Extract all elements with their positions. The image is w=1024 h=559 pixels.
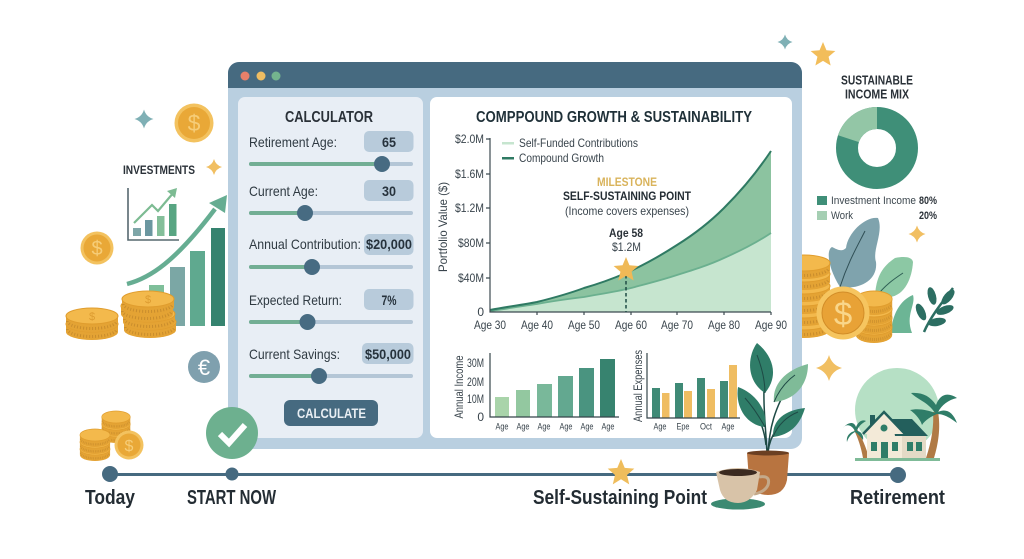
- x axis labels: Age 90: [755, 318, 787, 332]
- x axis labels: Age 60: [615, 318, 647, 332]
- annual income bar chart: Age: [602, 422, 614, 432]
- annual expenses bar chart: Epe: [676, 422, 690, 432]
- left palm: [843, 420, 869, 458]
- icon: teal sparkle: [778, 34, 792, 50]
- icon: coins above today: [80, 411, 144, 461]
- timeline line: [110, 473, 898, 476]
- annual income bar chart: Age: [516, 422, 530, 432]
- icon: green leaf: [875, 257, 914, 333]
- axes: [486, 138, 771, 315]
- y axis labels: $80M: [458, 236, 484, 250]
- current age control: Current Age:: [249, 183, 318, 199]
- panel: calculator: [238, 97, 423, 438]
- panel: growth charts: [430, 97, 792, 438]
- expected return control: 7%: [382, 293, 396, 308]
- milestone callout: $1.2M: [612, 240, 641, 254]
- y axis title: Portfolio Value ($): [436, 182, 450, 272]
- timeline: [85, 459, 945, 509]
- calculate button: CALCULATE: [297, 406, 366, 421]
- donut legend: 20%: [919, 210, 937, 222]
- coin stack small: [66, 308, 118, 340]
- y axis labels: $40M: [458, 271, 484, 285]
- annual income bar chart: Age: [538, 422, 550, 432]
- current savings control: $50,000: [365, 347, 411, 362]
- title bar: [228, 62, 802, 88]
- icon: teal sparkle: [134, 110, 154, 128]
- x axis labels: Age 70: [661, 318, 693, 332]
- milestone callout: MILESTONE: [597, 175, 657, 189]
- icon: dollar coin top: $: [188, 110, 201, 136]
- icon: coins above today: $: [125, 438, 134, 455]
- y axis labels: 0: [477, 305, 484, 319]
- coin stack small: $: [89, 311, 95, 323]
- node: self-sustaining point: [533, 459, 707, 509]
- icon: orange sparkle near house: [816, 355, 842, 381]
- annual income bar chart: 0: [477, 410, 484, 424]
- icon: orange sparkle: [206, 159, 222, 175]
- x axis labels: Age 50: [568, 318, 600, 332]
- right palm: [910, 393, 957, 458]
- x axis labels: Age 40: [521, 318, 553, 332]
- annual expenses bar chart: Age: [722, 422, 734, 432]
- milestone callout: (Income covers expenses): [565, 204, 689, 218]
- node: retirement: [850, 467, 945, 509]
- icon: dollar coin left: $: [91, 238, 103, 260]
- annual contribution control: Annual Contribution:: [249, 236, 361, 252]
- annual income bar chart: Age: [560, 422, 572, 432]
- income mix heading: [841, 74, 913, 102]
- annual income bar chart: Age: [496, 422, 508, 432]
- donut chart: [847, 118, 907, 178]
- annual expenses bar chart: Annual Expenses: [631, 350, 645, 422]
- window dots: [240, 72, 280, 80]
- donut legend: Investment Income: [831, 195, 916, 207]
- current age control: 30: [382, 184, 396, 199]
- coin stack behind window: [778, 255, 830, 338]
- icon: dark sprig: [914, 286, 957, 332]
- annual income bar chart: 10M: [467, 392, 484, 406]
- milestone marker: [614, 257, 638, 312]
- investments heading: INVESTMENTS: [123, 165, 195, 177]
- donut legend: 80%: [919, 195, 937, 207]
- annual expenses bar chart: Oct: [700, 422, 712, 432]
- portfolio area chart: [436, 132, 787, 332]
- icon: blue leaf: [829, 218, 880, 288]
- node: retirement: Retirement: [850, 487, 945, 509]
- icon: euro coin: €: [198, 355, 210, 380]
- retirement age control: Retirement Age:: [249, 134, 337, 150]
- annual income bar chart: Annual Income: [452, 355, 466, 418]
- annual expenses bar chart: [631, 350, 740, 432]
- app window: [228, 62, 802, 449]
- icon: retirement house with palms: [843, 368, 957, 461]
- milestone callout: Age 58: [609, 226, 643, 240]
- current savings control: Current Savings:: [249, 346, 340, 362]
- y axis labels: $2.0M: [455, 132, 484, 146]
- income mix donut panel: [778, 34, 937, 242]
- annual contribution control: [249, 234, 414, 275]
- node: start now: [187, 468, 276, 509]
- expected return control: [249, 289, 414, 330]
- y axis labels: $1.2M: [455, 201, 484, 215]
- big rising bar chart: [149, 228, 225, 326]
- left illustration: investments: [66, 104, 227, 383]
- annual expenses bar chart: Age: [654, 422, 666, 432]
- right illustration: leaves and coins: [778, 218, 957, 343]
- milestone callout: [563, 175, 692, 254]
- retirement age control: 65: [382, 135, 396, 150]
- x axis labels: [474, 318, 787, 332]
- chart legend: [502, 136, 638, 165]
- icon: start now check mark: [206, 407, 258, 459]
- chart legend: Compound Growth: [519, 151, 604, 165]
- icon: plant in pot: [737, 343, 808, 495]
- house: [867, 433, 903, 458]
- income mix heading: SUSTAINABLE: [841, 74, 913, 88]
- coin stack large: $: [145, 294, 151, 306]
- current savings control: [249, 343, 414, 384]
- node: start now: START NOW: [187, 487, 276, 509]
- mini growth chart icon: [128, 188, 179, 240]
- current age control: [249, 180, 414, 221]
- annual income bar chart: Age: [580, 422, 594, 432]
- icon: dollar coin top: [174, 104, 214, 142]
- y axis labels: $1.6M: [455, 167, 484, 181]
- x axis labels: Age 80: [708, 318, 740, 332]
- icon: orange sparkle: [908, 226, 926, 242]
- annual income bar chart: 20M: [467, 375, 484, 389]
- growth arrow: [127, 195, 227, 284]
- retirement age control: [249, 131, 414, 172]
- annual contribution control: $20,000: [366, 237, 412, 252]
- annual income bar chart: [452, 353, 619, 432]
- donut legend: Work: [831, 210, 853, 222]
- calculator heading: CALCULATOR: [285, 109, 373, 126]
- icon: coffee cup: [711, 468, 769, 510]
- coin stack right: [856, 291, 892, 343]
- y axis labels: [455, 132, 484, 319]
- calculate button: [284, 400, 378, 426]
- coin stack large: [121, 291, 176, 338]
- compound growth area: [490, 151, 771, 311]
- x axis labels: Age 30: [474, 318, 506, 332]
- annual income bar chart: 30M: [467, 356, 484, 370]
- node: today: [85, 466, 136, 509]
- node: self-sustaining point: Self-Sustaining Point: [533, 487, 707, 509]
- chart legend: Self-Funded Contributions: [519, 136, 638, 150]
- pot: [747, 453, 789, 495]
- node: today: Today: [85, 487, 136, 509]
- donut legend: [817, 195, 937, 222]
- expected return control: Expected Return:: [249, 292, 342, 308]
- chart heading: COMPPOUND GROWTH & SUSTAINABILITY: [476, 109, 752, 126]
- window frame: [228, 62, 802, 449]
- icon: gold star: [811, 42, 835, 66]
- income mix heading: INCOME MIX: [845, 88, 910, 102]
- icon: big dollar coin: [816, 286, 870, 340]
- icon: big dollar coin: $: [834, 295, 852, 332]
- self-funded contributions area: [490, 233, 771, 312]
- icon: dollar coin left: [80, 232, 114, 264]
- icon: euro coin: [188, 351, 220, 383]
- milestone callout: SELF-SUSTAINING POINT: [563, 189, 692, 203]
